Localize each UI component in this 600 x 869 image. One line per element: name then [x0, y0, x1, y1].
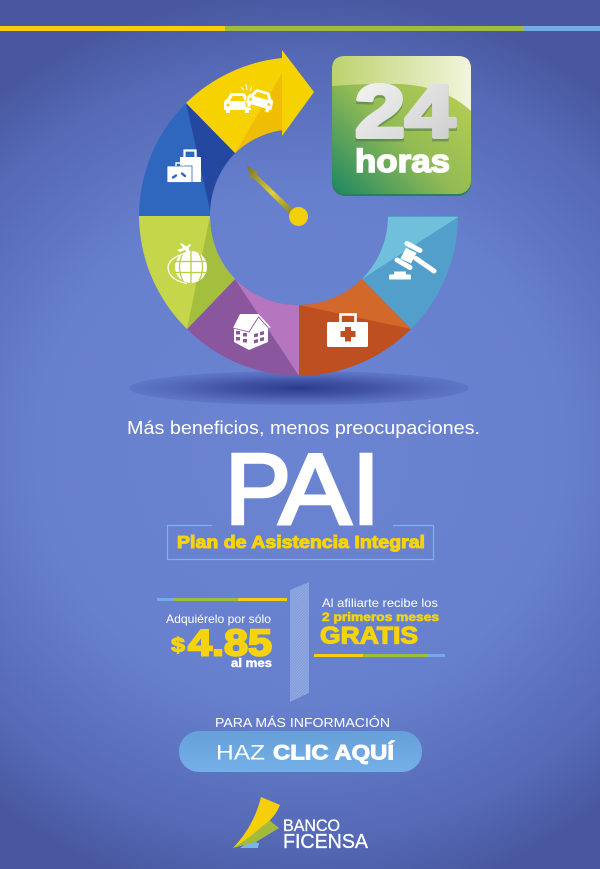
button: haz clic aqui [179, 731, 422, 772]
text: per month: al mes [231, 656, 272, 670]
stripe [314, 654, 445, 657]
text: affiliate label: Al afiliarte recibe los [322, 596, 438, 610]
icon: house [233, 314, 271, 350]
segment: legal (light blue) [362, 216, 458, 329]
segment: luggage (blue) [139, 103, 235, 216]
icon: globe with plane [168, 244, 207, 284]
text: clic aqui: CLIC AQUÍ [273, 742, 395, 764]
segment: medical (orange) [299, 279, 411, 376]
text: free: GRATIS [320, 622, 418, 650]
badge: 24 horas [332, 56, 471, 196]
circular benefits wheel [139, 50, 458, 376]
icon: medical kit [327, 314, 368, 347]
free months block [314, 596, 445, 657]
text: ficensa: FICENSA [283, 831, 369, 853]
clock needle [247, 166, 308, 226]
segment: home (purple) [187, 279, 299, 376]
text: banco: BANCO [283, 816, 340, 835]
ground shadow under the wheel [129, 371, 469, 405]
heading: PAI [225, 434, 380, 546]
text: dollar sign: $ [171, 635, 185, 657]
stripe [157, 598, 287, 601]
icon: car crash [224, 84, 276, 113]
text: 24: 24 [355, 70, 455, 153]
text: two months: 2 primeros meses [322, 610, 439, 624]
icon: luggage [167, 150, 201, 182]
icon: gavel [389, 244, 434, 280]
text: 24: 24 [355, 72, 455, 156]
logo mark [233, 797, 280, 848]
text: more information: PARA MÁS INFORMACIÓN [215, 715, 390, 730]
heading: PAI: P [225, 434, 291, 546]
text: plan name: Plan de Asistencia Integral [177, 532, 425, 552]
top tricolor stripe [0, 26, 600, 31]
text: buy label: Adquiérelo por sólo [166, 612, 271, 626]
segment: travel (lime green) [139, 216, 235, 329]
logo: Banco Ficensa [233, 797, 369, 853]
tagline: Más beneficios, menos preocupaciones. [127, 417, 480, 438]
segment: vehicle arrow (yellow) [186, 50, 314, 153]
text: haz: HAZ [216, 742, 265, 764]
text: price: 4.85 [188, 622, 272, 664]
price block [157, 598, 287, 670]
subtitle frame: Plan de Asistencia Integral [168, 526, 434, 560]
text: horas: horas [355, 143, 450, 179]
heading: PAI: I [352, 434, 380, 546]
heading: PAI: A [279, 434, 351, 546]
hatched divider [290, 582, 309, 702]
